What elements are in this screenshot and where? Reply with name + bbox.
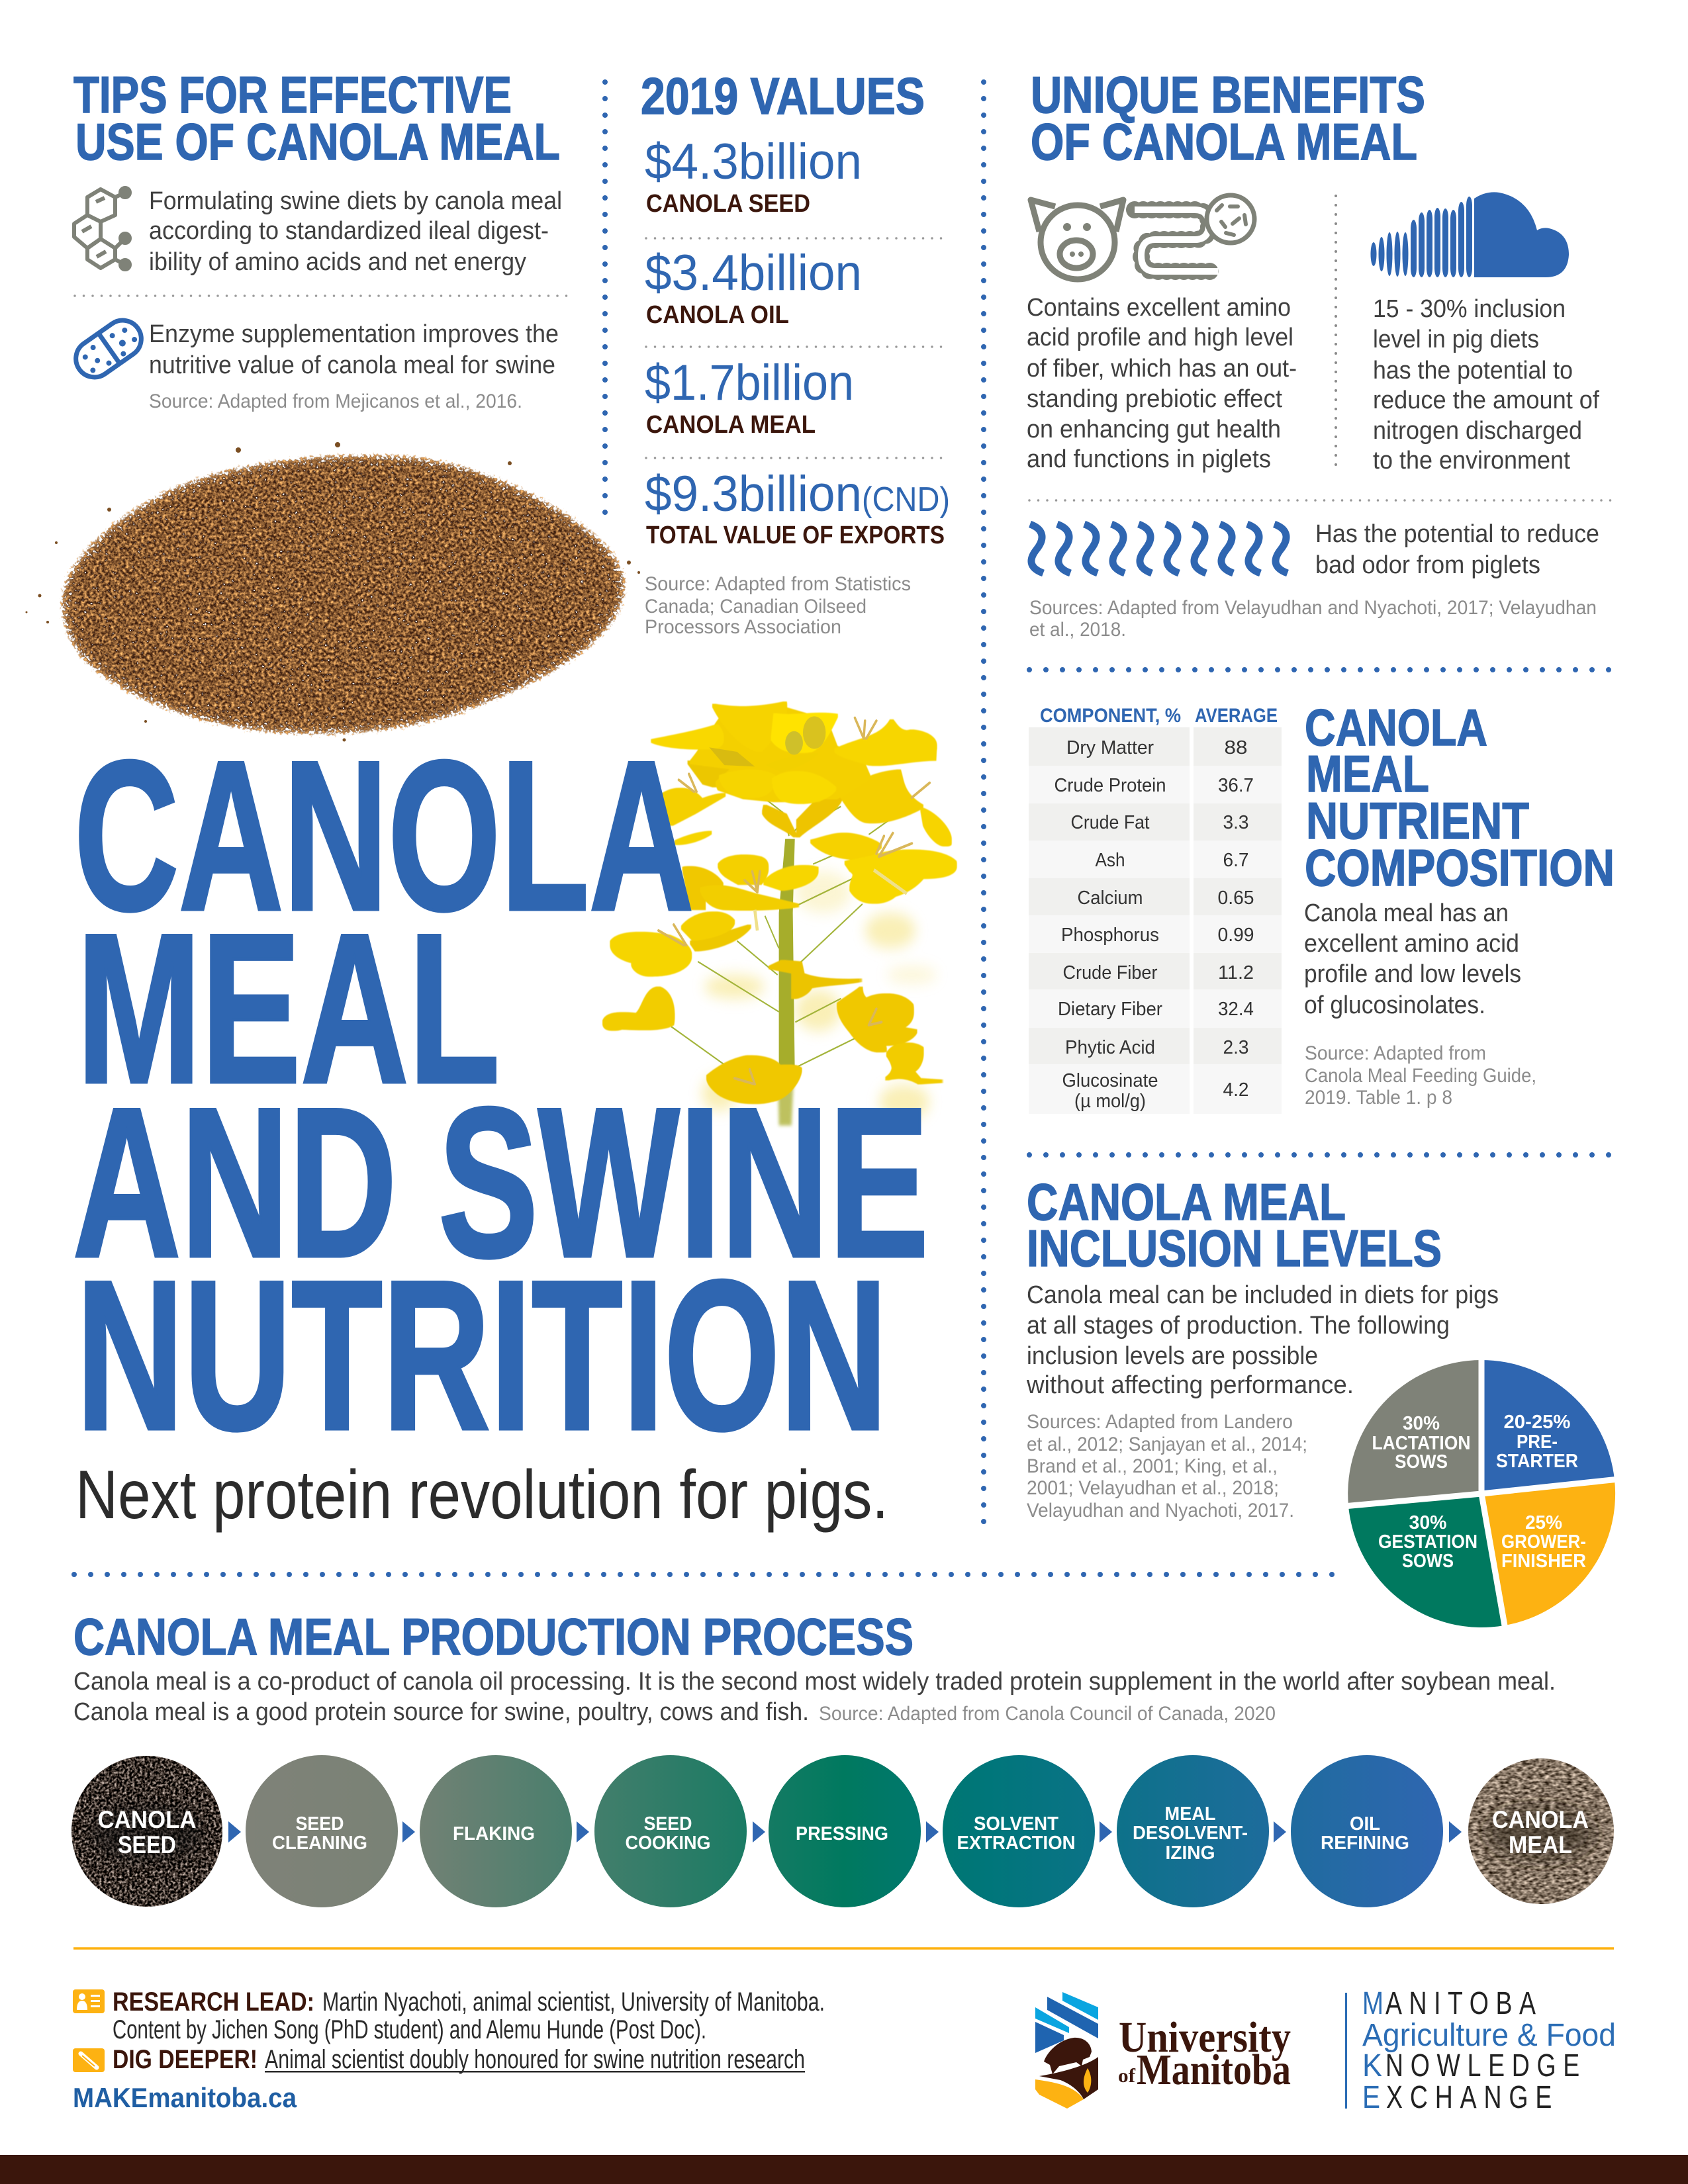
table: nutrient composition [1029,705,1282,1114]
stat: total value of exports [645,466,950,549]
source: inclusion levels: 2001; Velayudhan et al., 2018; [1027,1477,1279,1499]
stat: total value of exports: TOTAL VALUE OF EXPORTS [646,522,945,549]
icon: nitrogen cloud [1370,192,1569,277]
logo: wordmark: Manitoba [1137,2046,1291,2094]
source: values [645,573,911,638]
text: low glucosinolates: excellent amino acid [1304,930,1519,958]
flow: canola seed: SEED [118,1831,176,1858]
text: amino acid profile: Contains excellent amino [1027,294,1291,322]
flow: canola meal [1468,1758,1614,1904]
text: co-product description: Canola meal is a co-product of canola oil processing. It is the second most widely traded protein supplement in the world after soybean meal. [73,1668,1556,1696]
logo: Manitoba Agriculture and Food Knowledge Exchange: NOWLEDGE [1385,2048,1579,2083]
subtitle: Next protein revolution for pigs. [75,1457,888,1533]
arrow [228,1821,241,1843]
heading: unique benefits: UNIQUE BENEFITS [1031,66,1425,124]
image: canola flower [604,703,955,1126]
logo: Manitoba Agriculture and Food Knowledge Exchange: ANITOBA [1385,1986,1536,2021]
arrow [753,1821,765,1843]
text: low glucosinolates [1304,899,1521,1019]
pie chart: inclusion levels [1344,1357,1618,1629]
icon: molecule [74,188,130,269]
stat: canola meal: $1.7billion [645,355,854,411]
title: canola meal and swine nutrition: CANOLA [74,717,694,955]
flow: solvent extraction: SOLVENT [974,1813,1058,1835]
text: dig deeper: Animal scientist doubly honoured for swine nutrition research [265,2045,805,2074]
icon: research lead [73,1989,105,2013]
logo: University of Manitoba [1035,1992,1291,2109]
text: low glucosinolates: Canola meal has an [1304,899,1509,927]
flow: seed cooking: SEED [643,1813,692,1835]
table header: AVERAGE [1195,705,1278,727]
flow: solvent extraction: EXTRACTION [957,1833,1075,1854]
table: nutrient composition: 4.2 [1223,1079,1248,1101]
panel: tips for effective use of canola meal [69,66,569,412]
text: inclusion level and nitrogen [1373,295,1599,475]
pie label: gestation sows: SOWS [1402,1551,1454,1572]
text: formulating swine diets [149,187,562,276]
panel: production process [71,1608,1614,1907]
flow: meal desolventizing [1117,1755,1269,1907]
table: nutrient composition: 88 [1225,737,1247,758]
text: inclusion level and nitrogen: to the environment [1373,447,1570,475]
flow: meal desolventizing: DESOLVENT- [1133,1823,1248,1844]
source: benefits [1029,597,1597,641]
stat: canola seed [645,134,862,218]
pie label: pre-starter: PRE- [1517,1432,1558,1453]
table: nutrient composition: (µ mol/g) [1074,1091,1146,1112]
source: nutrient composition [1305,1042,1536,1109]
icon: odor waves [1030,524,1288,573]
flow: seed cleaning: SEED [295,1813,344,1835]
text: enzyme supplementation [149,320,559,379]
text: inclusion levels intro [1026,1281,1499,1399]
text: amino acid profile: and functions in piglets [1027,445,1271,473]
title: canola meal and swine nutrition [73,717,929,1475]
panel: inclusion levels [1026,1173,1618,1629]
heading: nutrient composition: COMPOSITION [1305,839,1615,897]
heading: nutrient composition: NUTRIENT [1306,792,1529,850]
text: enzyme supplementation: Enzyme supplementation improves the [149,320,559,348]
source: values: Processors Association [645,616,841,638]
text: low glucosinolates: profile and low levels [1304,960,1521,988]
flow: canola seed [71,1756,222,1907]
panel: nutrient composition text [1304,698,1615,1109]
source: nutrient composition: Canola Meal Feeding Guide, [1305,1065,1536,1087]
flow: flaking: FLAKING [453,1823,535,1844]
table: nutrient composition: Dry Matter [1066,737,1154,758]
pie label: lactation sows [1372,1413,1471,1473]
heading: unique benefits: OF CANOLA MEAL [1031,113,1417,171]
logo: Manitoba Agriculture and Food Knowledge Exchange: K [1362,2048,1382,2083]
table: nutrient composition: 2.3 [1223,1037,1248,1058]
text: inclusion level and nitrogen: nitrogen discharged [1373,417,1582,445]
pie label: lactation sows: LACTATION [1372,1433,1471,1454]
source: inclusion levels: Velayudhan and Nyachoti, 2017. [1027,1500,1294,1522]
flow: pressing [769,1755,921,1907]
text: bad odor: Has the potential to reduce [1315,520,1599,548]
logo: Manitoba Agriculture and Food Knowledge Exchange [1345,1986,1616,2115]
icon: dig deeper link [73,2048,105,2072]
text: amino acid profile: on enhancing gut health [1027,416,1281,443]
source: tips: Source: Adapted from Mejicanos et al., 2016. [149,390,522,412]
text: co-product description: Source: Adapted from Canola Council of Canada, 2020 [819,1703,1276,1725]
image: canola meal pile [25,442,640,741]
table: nutrient composition: 32.4 [1218,999,1254,1020]
source: values: Source: Adapted from Statistics [645,573,911,595]
text: inclusion levels intro: at all stages of production. The following [1027,1312,1450,1340]
text: amino acid profile [1027,294,1297,473]
table header [1040,705,1278,727]
heading: nutrient composition: MEAL [1306,745,1429,803]
arrow [402,1821,415,1843]
heading: production process: CANOLA MEAL PRODUCTION PROCESS [73,1608,914,1666]
footer bar [0,2155,1688,2184]
flow: canola meal: CANOLA [1492,1806,1589,1833]
text: research lead: Content by Jichen Song (PhD student) and Alemu Hunde (Post Doc). [113,2015,706,2044]
flow: canola meal: MEAL [1509,1831,1572,1858]
heading: unique benefits [1031,66,1425,171]
flow: oil refining: REFINING [1321,1833,1409,1854]
table: nutrient composition: 36.7 [1218,775,1254,796]
heading: tips: USE OF CANOLA MEAL [75,113,560,171]
text: co-product description: Canola meal is a good protein source for swine, poultry, cows and fish. [73,1698,809,1726]
logo: Manitoba Agriculture and Food Knowledge Exchange: XCHANGE [1386,2080,1552,2115]
table: nutrient composition: 0.65 [1218,887,1254,909]
table: nutrient composition: Phytic Acid [1065,1037,1155,1058]
source: inclusion levels: Brand et al., 2001; King, et al., [1027,1455,1278,1477]
text: research lead: RESEARCH LEAD: [113,1987,314,2017]
stat: canola meal [645,355,854,439]
text: dig deeper: DIG DEEPER! [113,2045,258,2074]
text: dig deeper [113,2045,805,2074]
table: nutrient composition: Crude Fat [1071,812,1149,833]
heading: inclusion levels: CANOLA MEAL [1027,1173,1346,1231]
flow: seed cooking [594,1755,747,1907]
pie label: pre-starter: STARTER [1496,1451,1578,1472]
text: amino acid profile: acid profile and high level [1027,324,1293,351]
logo: wordmark [1118,2013,1291,2094]
title: canola meal and swine nutrition: NUTRITION [76,1237,888,1475]
flow: meal desolventizing: MEAL [1165,1803,1215,1825]
pie label: gestation sows: GESTATION [1378,1531,1477,1553]
heading: inclusion levels: INCLUSION LEVELS [1027,1219,1442,1277]
arrow [926,1821,939,1843]
text: enzyme supplementation: nutritive value of canola meal for swine [149,351,555,379]
source: inclusion levels [1027,1411,1307,1522]
flow: oil refining: OIL [1350,1813,1380,1835]
text: formulating swine diets: Formulating swine diets by canola meal [149,187,562,215]
source: values: Canada; Canadian Oilseed [645,596,867,617]
logo: Manitoba Agriculture and Food Knowledge Exchange: E [1362,2080,1380,2115]
stat: canola oil [645,245,862,329]
source: inclusion levels: et al., 2012; Sanjayan et al., 2014; [1027,1433,1307,1455]
arrow [1100,1821,1112,1843]
pie label: pre-starter [1496,1412,1578,1472]
text: inclusion level and nitrogen: reduce the amount of [1373,387,1599,414]
table: nutrient composition: Crude Fiber [1063,962,1158,983]
title: canola meal and swine nutrition: AND SWINE [73,1064,929,1302]
flow: oil refining [1291,1755,1443,1907]
table: nutrient composition: Calcium [1078,887,1143,909]
stat: canola meal: CANOLA MEAL [646,411,816,439]
text: inclusion level and nitrogen: has the potential to [1373,357,1573,385]
pie label: lactation sows: SOWS [1395,1451,1448,1473]
table header: COMPONENT, % [1040,705,1181,727]
table: nutrient composition: 6.7 [1223,850,1248,871]
text: low glucosinolates: of glucosinolates. [1304,991,1485,1019]
source: nutrient composition: Source: Adapted from [1305,1042,1486,1064]
logo: Manitoba Agriculture and Food Knowledge Exchange: Agriculture & Food [1362,2018,1616,2053]
icon: gut with bacteria [1135,195,1254,271]
flow: canola seed: CANOLA [98,1806,196,1833]
pie label: pre-starter: 20-25% [1504,1412,1571,1433]
text: co-product description [73,1668,1556,1726]
text: amino acid profile: of fiber, which has an out- [1027,355,1297,383]
source: inclusion levels: Sources: Adapted from Landero [1027,1411,1293,1433]
text: inclusion levels intro: Canola meal can be included in diets for pigs [1027,1281,1499,1309]
text: research lead [113,1987,825,2044]
text: inclusion levels intro: without affecting performance. [1026,1371,1354,1399]
table: nutrient composition: 3.3 [1223,812,1248,833]
pie label: grower-finisher: 25% [1525,1512,1562,1533]
text: inclusion level and nitrogen: level in pig diets [1373,326,1539,353]
title: canola meal and swine nutrition: MEAL [77,890,500,1128]
source: nutrient composition: 2019. Table 1. p 8 [1305,1087,1452,1109]
panel: unique benefits [1027,66,1614,641]
flow: seed cooking: COOKING [625,1833,711,1854]
heading: inclusion levels [1027,1173,1442,1277]
stat: total value of exports: (CND) [862,480,950,519]
panel: footer credits [73,1987,825,2113]
pie label: grower-finisher: GROWER- [1501,1531,1586,1553]
heading: nutrient composition: CANOLA [1305,698,1487,756]
heading: 2019 values: 2019 VALUES [641,67,925,125]
source: benefits: et al., 2018. [1029,619,1126,641]
logo: wordmark: University [1119,2013,1291,2062]
source: benefits: Sources: Adapted from Velayudhan and Nyachoti, 2017; Velayudhan [1029,597,1597,619]
icon: pig face [1031,200,1123,279]
flow: pressing: PRESSING [796,1823,888,1844]
heading: tips [73,66,560,171]
panel: 2019 values [641,67,950,638]
stat: canola seed: CANOLA SEED [646,190,810,218]
arrow [1449,1821,1462,1843]
table: nutrient composition: Glucosinate [1062,1070,1158,1091]
heading: tips: TIPS FOR EFFECTIVE [73,66,512,124]
flow: seed cleaning: CLEANING [272,1833,367,1854]
table: nutrient composition: Dietary Fiber [1058,999,1162,1020]
text: formulating swine diets: according to standardized ileal digest- [149,217,549,245]
flow: meal desolventizing: IZING [1165,1843,1215,1864]
stat: canola oil: $3.4billion [645,245,862,301]
arrow [1274,1821,1286,1843]
icon: enzyme capsule [69,313,148,385]
flow: solvent extraction [943,1755,1095,1907]
stat: canola oil: CANOLA OIL [646,301,789,329]
stat: canola seed: $4.3billion [645,134,862,190]
text: amino acid profile: standing prebiotic effect [1027,385,1282,413]
flow: seed cleaning [246,1755,398,1907]
pie label: gestation sows [1378,1512,1477,1572]
logo: wordmark: of [1118,2065,1136,2087]
logo: shield [1035,1992,1098,2109]
text: inclusion level and nitrogen: 15 - 30% inclusion [1373,295,1566,323]
text: formulating swine diets: ibility of amino acids and net energy [149,248,526,276]
table: nutrient composition: Phosphorus [1061,925,1159,946]
pie label: grower-finisher: FINISHER [1501,1551,1586,1572]
text: bad odor [1315,520,1599,579]
logo: Manitoba Agriculture and Food Knowledge Exchange: M [1362,1986,1383,2021]
flow: flaking [420,1755,572,1907]
text: bad odor: bad odor from piglets [1315,551,1540,579]
heading: nutrient composition [1305,698,1615,897]
stat: total value of exports: $9.3billion [645,466,862,522]
arrow [577,1821,589,1843]
text: research lead: Martin Nyachoti, animal scientist, University of Manitoba. [322,1987,825,2017]
table: nutrient composition: Ash [1095,850,1125,871]
text: inclusion levels intro: inclusion levels are possible [1027,1342,1318,1370]
table: nutrient composition: 0.99 [1218,925,1254,946]
table: nutrient composition: Crude Protein [1054,775,1166,796]
table: nutrient composition: 11.2 [1218,962,1254,983]
text: website: MAKEmanitoba.ca [73,2082,297,2113]
pie label: gestation sows: 30% [1409,1512,1447,1533]
pie label: lactation sows: 30% [1403,1413,1440,1434]
pie label: grower-finisher [1501,1512,1586,1572]
